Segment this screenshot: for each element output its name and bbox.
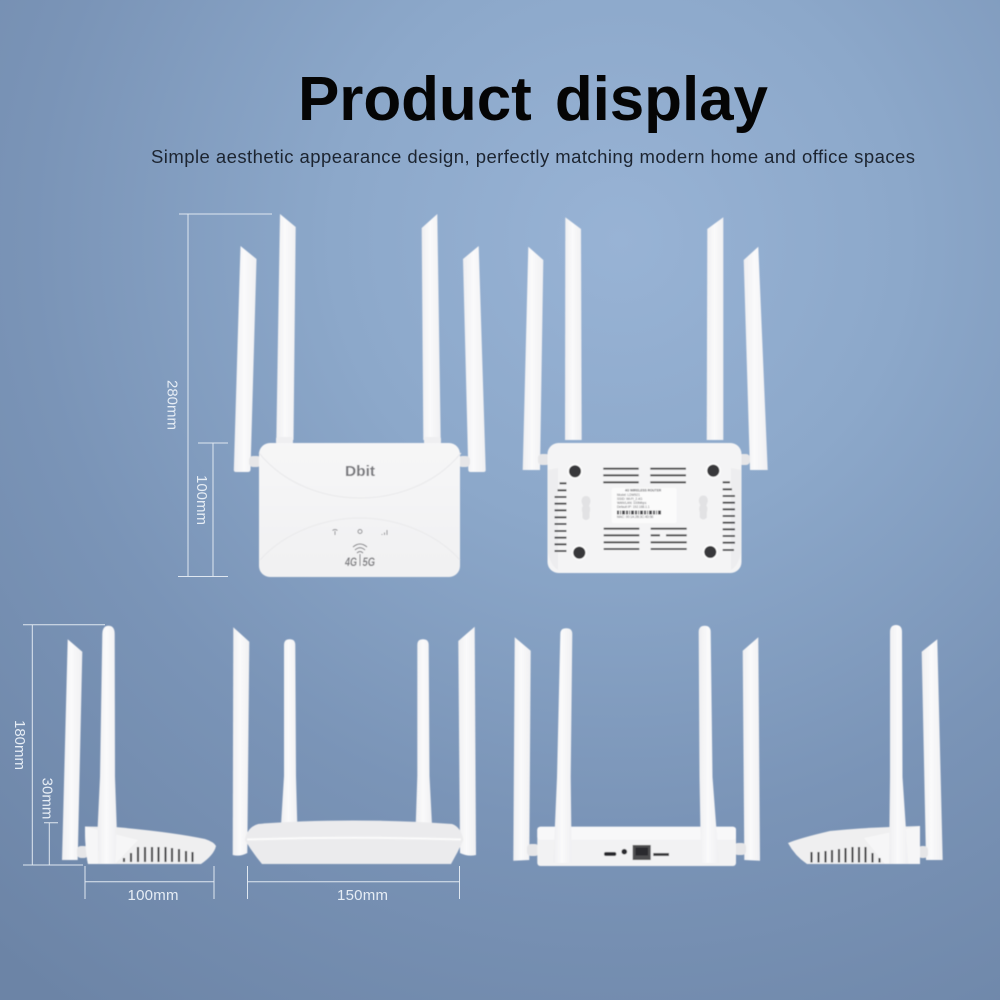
router side view right: [788, 625, 943, 864]
USB-C port: [604, 852, 616, 856]
side vents: [124, 847, 192, 862]
4G 5G mark: 5G: [362, 557, 375, 569]
dimension: 100mm depth: 100mm: [128, 887, 178, 904]
side vents: [812, 847, 880, 862]
4G 5G mark: 4G: [344, 557, 357, 569]
router rear port view: [513, 626, 760, 866]
dimension: 150mm width: [248, 866, 460, 904]
dimension: 100mm depth: [85, 866, 214, 904]
product label: WAN/LAN: 100Mbps: [617, 501, 647, 505]
router low front view: [233, 627, 476, 864]
subtitle: Simple aesthetic appearance design, perfectly matching modern home and office spaces: [151, 146, 915, 167]
keyholes: [582, 496, 590, 520]
4G 5G mark: [344, 557, 375, 569]
top vent slots: [603, 469, 686, 482]
product label: Default IP: 192.168.1.1: [617, 505, 650, 509]
indicator icons: [332, 530, 387, 535]
rubber feet: [568, 464, 720, 560]
dimension: 280mm and 100mm front height: 280mm: [164, 380, 180, 430]
SIM slot: [653, 853, 669, 856]
dimension: 280mm and 100mm front height: 100mm: [193, 475, 210, 525]
router side view left: [62, 626, 216, 864]
product label: SSID: Wi-Fi_2.4G: [617, 497, 643, 501]
reset hole: [622, 849, 627, 854]
bottom vent slots: [604, 529, 687, 549]
product label: MAC: 00:1A:2B:3C:4D:5E: [617, 515, 654, 519]
dimension: 180mm and 30mm side height: 180mm: [11, 720, 28, 770]
dimension: 180mm and 30mm side height: [11, 625, 105, 865]
wifi icon: [353, 544, 367, 566]
logo: Dbit: [345, 463, 375, 480]
product label: [612, 488, 677, 523]
dimension: 280mm and 100mm front height: [164, 214, 272, 576]
side vents: [554, 483, 566, 551]
product label: Model: LDW921: [617, 493, 640, 497]
router front view: [234, 214, 486, 577]
RJ45 port: [633, 845, 651, 860]
dimension: 150mm width: 150mm: [337, 887, 388, 904]
product label: 4G WIRELESS ROUTER: [625, 488, 662, 492]
title: Product display: [298, 65, 769, 134]
dimension: 180mm and 30mm side height: 30mm: [39, 778, 56, 819]
router back view: [523, 217, 768, 573]
